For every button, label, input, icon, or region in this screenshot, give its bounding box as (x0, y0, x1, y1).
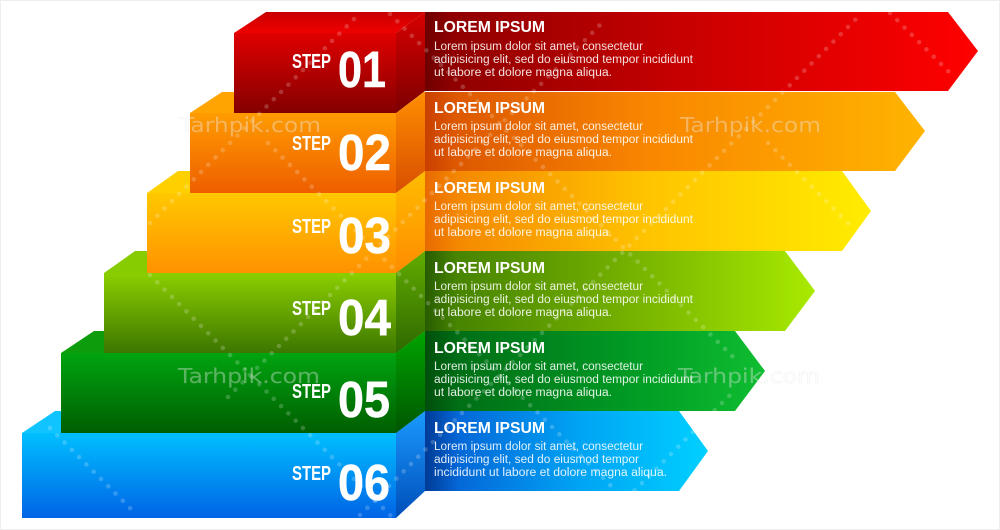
arrow band: step 1 (425, 12, 978, 91)
arrow band: step 3: adipisicing elit, sed do eiusmod tempor incididunt (434, 214, 694, 226)
arrow band: step 6: Lorem ipsum dolor sit amet, consectetur (434, 441, 643, 453)
watermark: Tarhpik.com text: Tarhpik.com (179, 113, 321, 137)
3D block: step 3 (147, 171, 425, 273)
arrow band: step 3: LOREM IPSUM (434, 180, 545, 197)
3D block: step 5: 05 (338, 371, 390, 428)
watermark: Tarhpik.com text: Tarhpik.com (677, 364, 820, 388)
arrow band: step 4: adipisicing elit, sed do eiusmod tempor incididunt (434, 294, 694, 306)
arrow band: step 6 (425, 411, 708, 491)
arrow band: step 2: Lorem ipsum dolor sit amet, consectetur (434, 121, 643, 133)
3D block: step 2: STEP (292, 133, 331, 155)
3D block: step 5: STEP (292, 381, 331, 403)
arrow band: step 4: Lorem ipsum dolor sit amet, consectetur (434, 281, 643, 293)
3D block: step 4: STEP (292, 298, 331, 320)
3D block: step 3: STEP (292, 216, 331, 238)
arrow band: step 1: LOREM IPSUM (434, 19, 545, 36)
arrow band: step 4: ut labore et dolore magna aliqua. (434, 307, 612, 319)
arrow band: step 1: adipisicing elit, sed do eiusmod tempor incididunt (434, 54, 694, 66)
arrow band: step 4: LOREM IPSUM (434, 260, 545, 277)
3D block: step 3: 03 (338, 207, 391, 264)
arrow band: step 5 (425, 331, 765, 411)
arrow band: step 5: Lorem ipsum dolor sit amet, consectetur (434, 361, 643, 373)
arrow band: step 3: ut labore et dolore magna aliqua. (434, 227, 612, 239)
arrow band: step 4 (425, 251, 815, 331)
3D block: step 4 (104, 251, 425, 353)
watermark: Tarhpik.com text: Tarhpik.com (679, 113, 821, 137)
arrow band: step 2: ut labore et dolore magna aliqua. (434, 147, 612, 159)
3D block: step 1: STEP (292, 51, 331, 73)
3D block: step 1 (234, 12, 425, 113)
3D block: step 5 (61, 331, 425, 433)
arrow band: step 1: ut labore et dolore magna aliqua. (434, 67, 612, 79)
arrow band: step 1: Lorem ipsum dolor sit amet, consectetur (434, 41, 643, 53)
arrow band: step 2: adipisicing elit, sed do eiusmod tempor incididunt (434, 134, 694, 146)
arrow band: step 5: ut labore et dolore magna aliqua. (434, 387, 612, 399)
3D block: step 6: STEP (292, 463, 331, 485)
arrow band: step 6: LOREM IPSUM (434, 420, 545, 437)
arrow band: step 2: LOREM IPSUM (434, 100, 545, 117)
arrow band: step 6: adipisicing elit, sed do eiusmod tempor (434, 454, 639, 466)
3D block: step 1: 01 (338, 41, 386, 98)
arrow band: step 5: adipisicing elit, sed do eiusmod tempor incididunt (434, 374, 694, 386)
arrow band: step 2 (425, 92, 925, 171)
arrow band: step 6: incididunt ut labore et dolore magna aliqua. (434, 467, 667, 479)
arrow band: step 3: Lorem ipsum dolor sit amet, consectetur (434, 201, 643, 213)
3D block: step 2 (190, 92, 425, 193)
3D block: step 6 (22, 411, 425, 518)
3D block: step 2: 02 (338, 124, 391, 181)
3D block: step 4: 04 (338, 289, 392, 346)
watermark: Tarhpik.com text (177, 113, 821, 388)
3D block: step 6: 06 (338, 454, 390, 511)
arrow band: step 5: LOREM IPSUM (434, 340, 545, 357)
arrow band: step 3 (425, 171, 871, 251)
watermark: Tarhpik.com text: Tarhpik.com (177, 364, 320, 388)
